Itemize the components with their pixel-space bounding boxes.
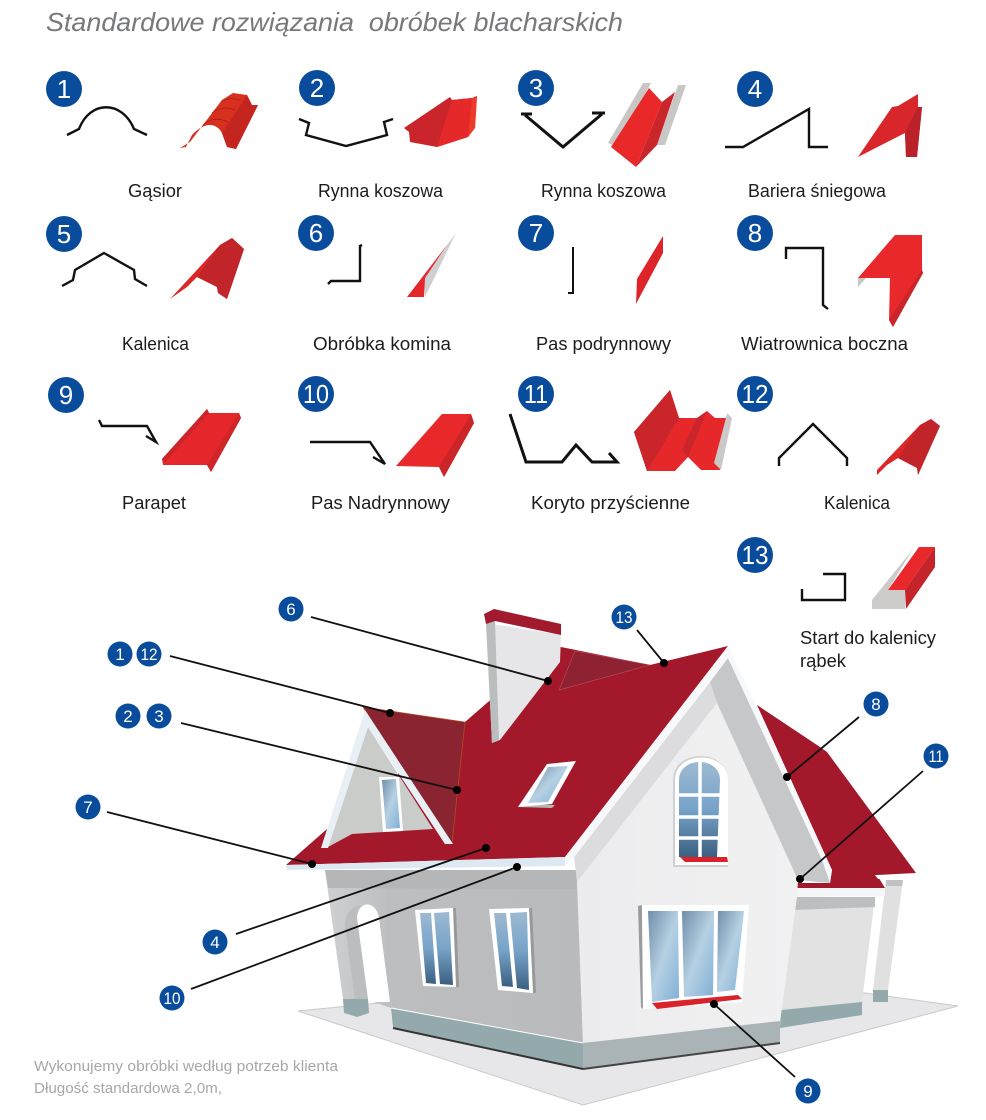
left wall plinth (391, 1008, 583, 1069)
label 4: Bariera śniegowa (748, 180, 887, 201)
left wall window 2 (489, 908, 536, 993)
panel: 2 Rynna koszowa (299, 70, 477, 201)
profile 8 (786, 248, 828, 309)
badge 2: 2 (310, 73, 324, 103)
profile 11 (510, 414, 617, 462)
label 13: Start do kalenicy (800, 627, 937, 648)
large front window (638, 905, 749, 1009)
badge 3: 3 (529, 73, 543, 103)
small badge 7 (76, 794, 100, 820)
red part 12 (877, 419, 940, 475)
red part 9 (162, 409, 241, 472)
panel: 12 Kalenica (737, 376, 940, 513)
small badge 2 (116, 704, 140, 728)
annex fascia (795, 888, 885, 897)
leader 8 (783, 717, 859, 781)
badge 6 (298, 215, 334, 251)
small badge 4 (202, 930, 228, 954)
small badge 7: 7 (83, 798, 93, 817)
ground slab (298, 993, 958, 1105)
label 10: Pas Nadrynnowy (311, 492, 451, 513)
profile 7 (568, 247, 573, 293)
label 12: Kalenica (824, 492, 891, 513)
red part 4 (858, 94, 922, 157)
small badge 11: 11 (928, 747, 944, 766)
panel: 7 Pas podrynnowy (518, 215, 672, 354)
title: Standardowe rozwiązania obróbek blacharskich (46, 7, 623, 37)
red part 10 (396, 414, 474, 477)
profile 12 (779, 424, 847, 466)
small badge 12 (136, 642, 162, 666)
badge 9 (48, 377, 84, 413)
front gable wall (577, 703, 798, 1043)
panel: 11 Koryto przyścienne (510, 376, 732, 513)
ridge triangle (559, 651, 650, 690)
label 1: Gąsior (128, 180, 182, 201)
footnote: Długość standardowa 2,0m, (34, 1081, 222, 1097)
profile 1 (67, 107, 147, 135)
panel: 1 Gąsior (46, 71, 258, 201)
small badge 11 (924, 744, 948, 768)
red part 2 (404, 96, 477, 147)
small badge 8: 8 (871, 695, 881, 714)
red part 13 (872, 547, 935, 609)
badge 5 (46, 216, 82, 252)
left gable soffit (574, 682, 717, 882)
badge 2 (299, 70, 335, 106)
left wall window 1 (415, 908, 459, 987)
small badge 3: 3 (154, 707, 164, 726)
eave fascia (286, 857, 565, 870)
badge 5: 5 (57, 219, 71, 249)
badge 7: 7 (529, 218, 543, 248)
badge 1: 1 (57, 74, 71, 104)
leader 6 (311, 617, 552, 685)
profile 4 (725, 109, 828, 147)
badge 8 (737, 215, 773, 251)
label 3: Rynna koszowa (541, 180, 667, 201)
profile 3 (521, 113, 605, 147)
profile 2 (299, 119, 393, 146)
profile 9 (99, 420, 156, 442)
red part 8 (858, 235, 923, 327)
right gable soffit (710, 658, 832, 883)
badge 9: 9 (59, 380, 73, 410)
panel: 13 Start do kalenicy rąbek (737, 537, 937, 671)
badge 11 (518, 376, 554, 412)
badge 12 (737, 376, 773, 412)
footnote: Wykonujemy obróbki według potrzeb klienta (34, 1059, 339, 1075)
panel: 4 Bariera śniegowa (725, 71, 922, 201)
badge 4 (737, 71, 773, 107)
dormer face (328, 727, 433, 847)
front plinth (583, 1021, 780, 1069)
gable fascia (565, 646, 832, 883)
label 13 line 2: rąbek (800, 650, 847, 671)
badge 10: 10 (303, 379, 329, 409)
small badge 9 (796, 1078, 820, 1104)
small badge 8 (864, 692, 888, 716)
badge 8: 8 (748, 218, 762, 248)
leader 11 (796, 771, 923, 883)
red part 11 (634, 390, 732, 471)
red part 1 (180, 93, 258, 149)
panel: 3 Rynna koszowa (518, 70, 686, 201)
leader 7 (107, 812, 316, 868)
dormer fascia (321, 710, 453, 848)
right roof (757, 705, 916, 888)
small badge 1: 1 (115, 645, 125, 664)
badge 13 (737, 537, 773, 573)
small badge 13 (612, 604, 636, 630)
label 6: Obróbka komina (313, 333, 452, 354)
leader 2 and 3 (181, 723, 461, 794)
panel: 9 Parapet (48, 377, 241, 513)
badge 10 (298, 376, 334, 412)
panel: 6 Obróbka komina (298, 215, 456, 354)
label 9: Parapet (122, 492, 186, 513)
profile 5 (62, 253, 147, 286)
label 7: Pas podrynnowy (536, 333, 672, 354)
badge 11: 11 (524, 379, 548, 409)
small badge 3 (146, 704, 172, 728)
roof window (518, 761, 576, 808)
badge 1 (46, 71, 82, 107)
badge 6: 6 (309, 218, 323, 248)
small badge 10: 10 (164, 989, 180, 1008)
small badge 6: 6 (286, 600, 296, 619)
small badge 1 (108, 642, 132, 666)
label 5: Kalenica (122, 333, 190, 354)
badge 7 (518, 215, 554, 251)
house illustration (286, 609, 958, 1105)
red part 7 (636, 236, 663, 304)
main roof (286, 646, 728, 865)
leader 13 (637, 630, 668, 667)
dormer window (379, 777, 403, 832)
chimney (484, 609, 561, 743)
small badge 10 (160, 986, 184, 1010)
leader 10 (191, 863, 521, 989)
small badge 12: 12 (140, 645, 158, 664)
downpipe column (873, 880, 903, 1002)
arch opening (357, 904, 390, 1002)
panel: 10 Pas Nadrynnowy (298, 376, 474, 513)
badge 4: 4 (748, 74, 762, 104)
profile 13 (802, 574, 845, 600)
badge 13: 13 (742, 540, 768, 570)
label 2: Rynna koszowa (318, 180, 444, 201)
red part 3 (608, 83, 686, 167)
dormer roof side (363, 707, 465, 844)
badge 12: 12 (742, 379, 768, 409)
arched window (673, 756, 728, 867)
red part 6 (407, 233, 456, 297)
footnote (34, 1059, 339, 1097)
small badge 13: 13 (616, 608, 632, 627)
right annex wall (780, 897, 875, 1028)
small badge 6 (278, 596, 304, 622)
label 8: Wiatrownica boczna (741, 333, 909, 354)
leader 9 (710, 1000, 795, 1077)
small badge 4: 4 (210, 933, 220, 952)
panel: 5 Kalenica (46, 216, 244, 354)
badge 3 (518, 70, 554, 106)
profile 6 (328, 245, 362, 284)
small badge 2: 2 (123, 707, 133, 726)
leader 4 (236, 844, 490, 934)
pillar base (343, 999, 369, 1017)
label 11: Koryto przyścienne (531, 492, 690, 513)
arch shadow (345, 905, 368, 1000)
panel: 8 Wiatrownica boczna (737, 215, 923, 354)
red part 5 (170, 238, 244, 299)
leader lines and markers (107, 617, 923, 1077)
profile 10 (310, 442, 385, 464)
leader 1 and 12 (170, 656, 394, 717)
small badge 9: 9 (803, 1082, 813, 1101)
left wall (325, 870, 583, 1043)
